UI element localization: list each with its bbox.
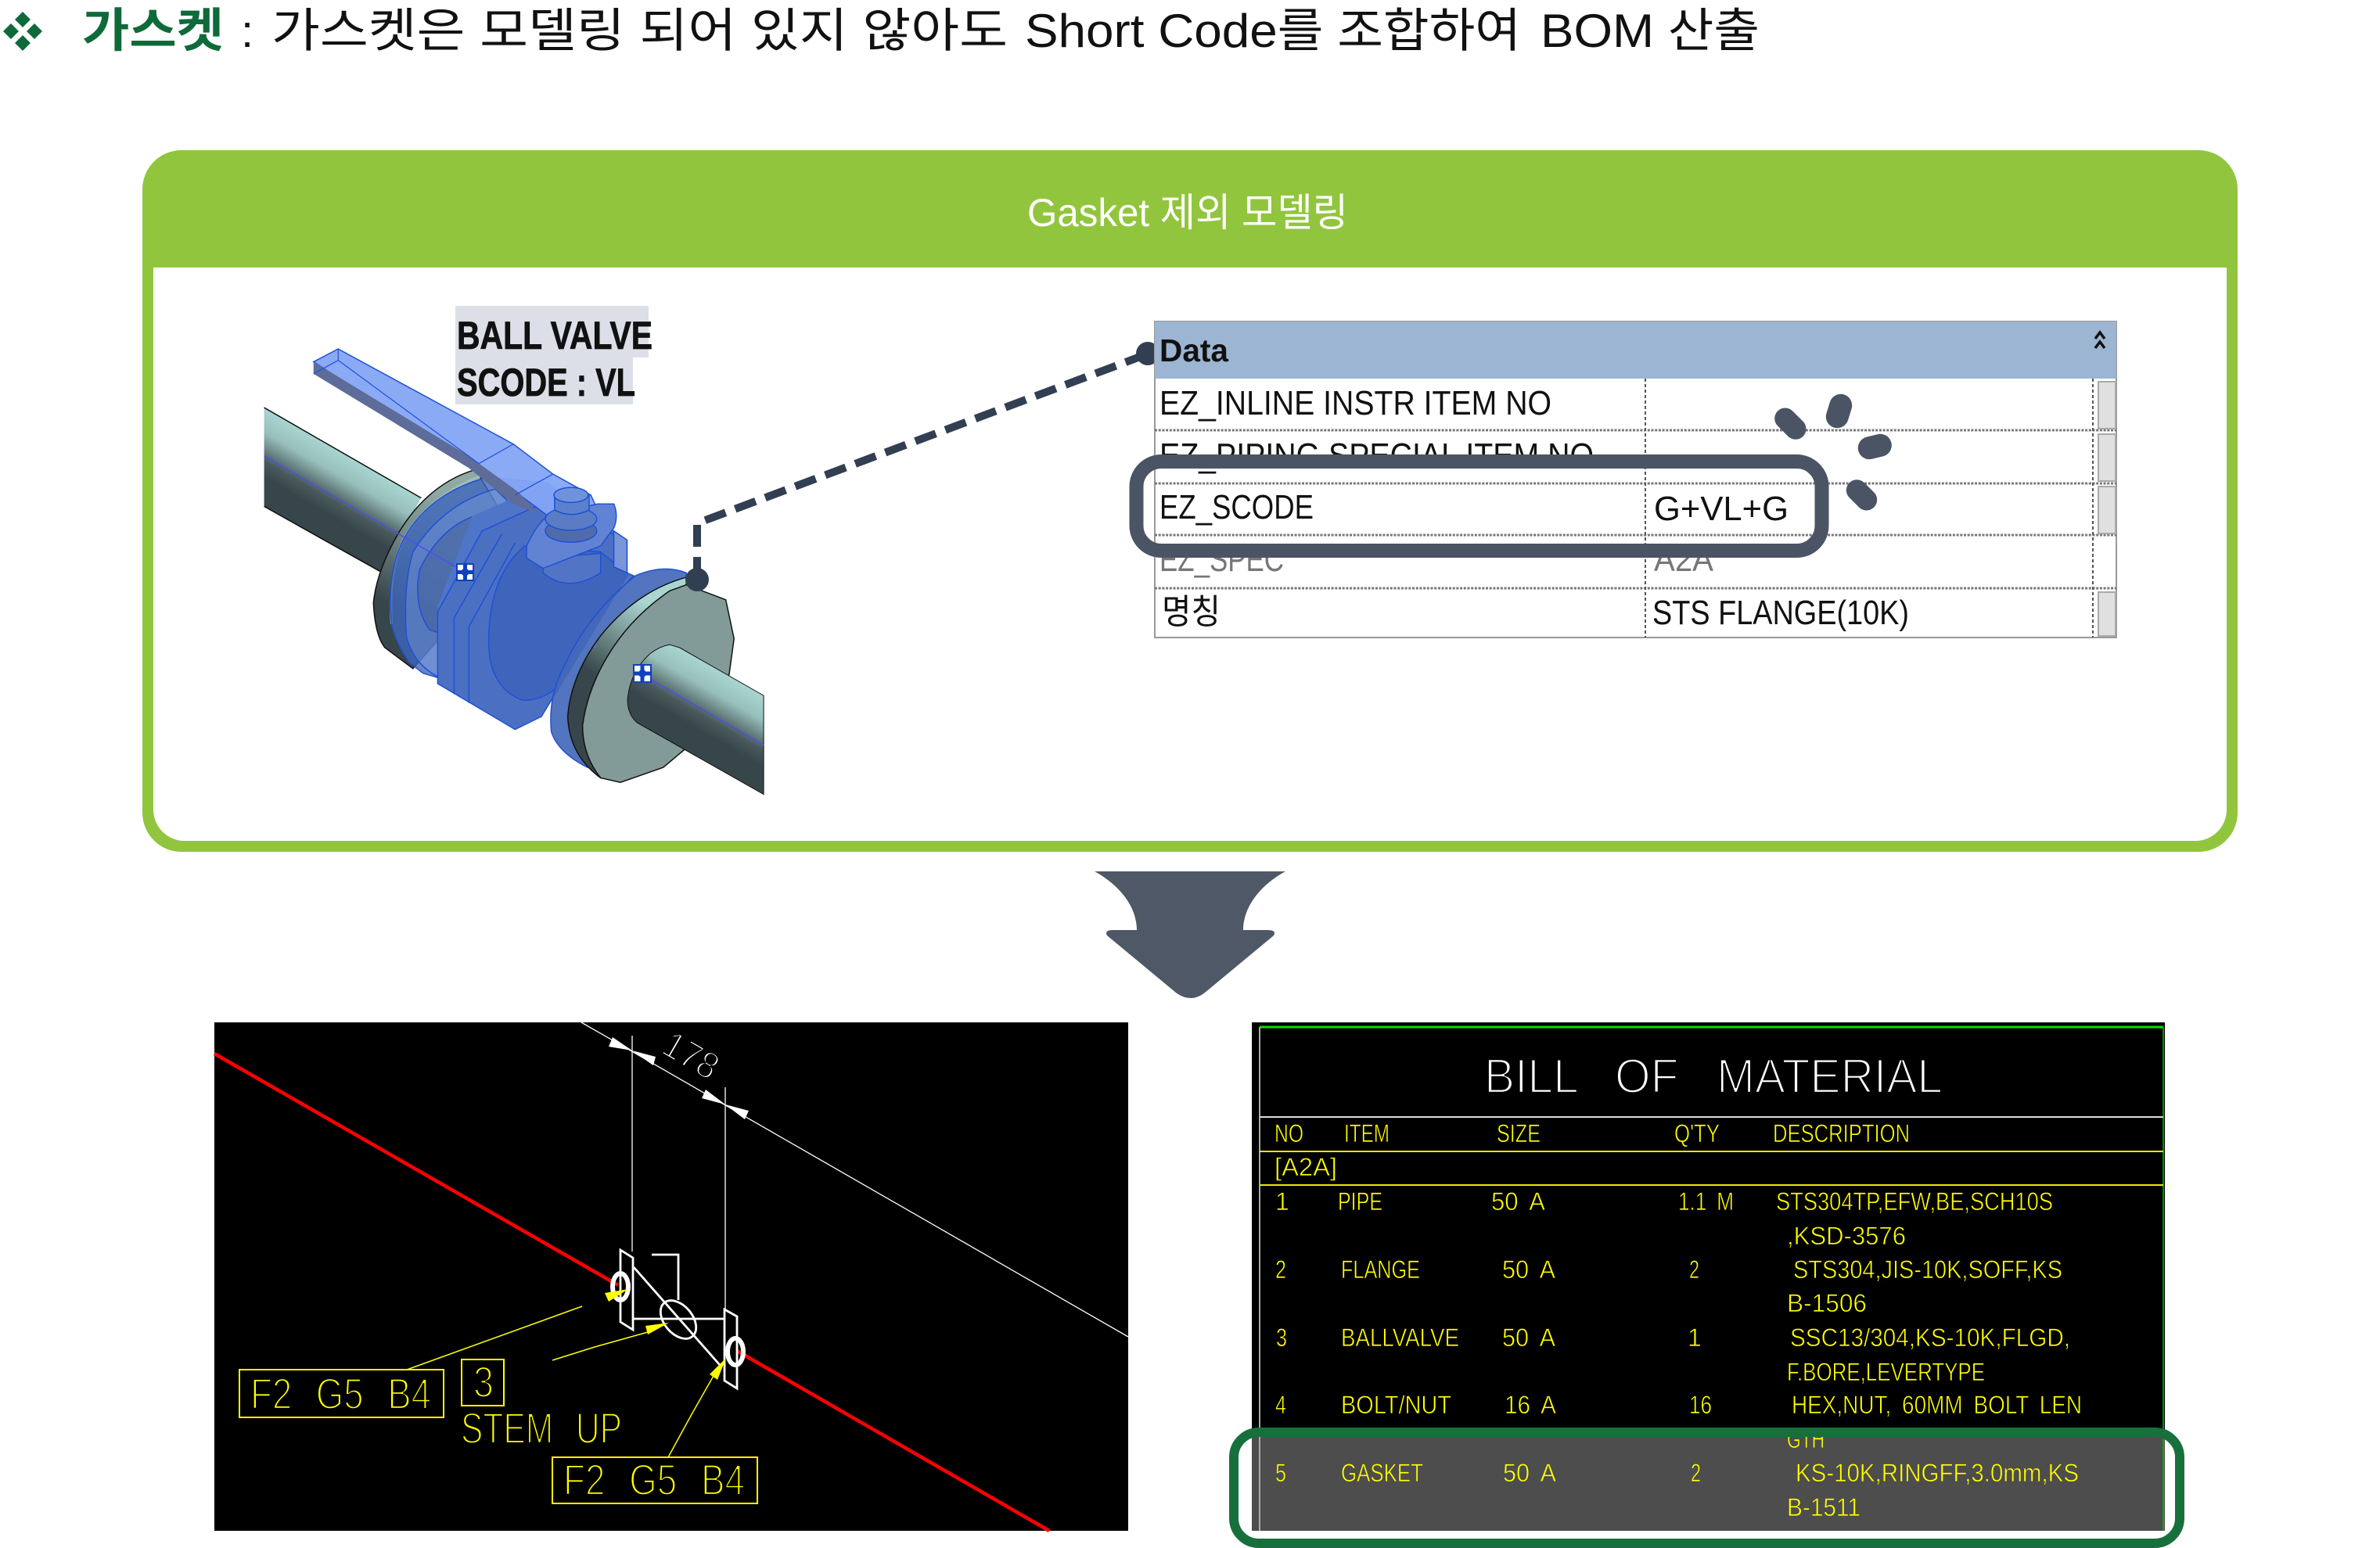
title: 가스켓은 모델링 되어 있지 않아도 [271,5,1008,57]
BOM column headers: ITEM [1344,1119,1390,1148]
table rows: 명칭 [1162,584,1221,634]
BOM column headers: Q'TY [1674,1119,1720,1148]
panel: isometric CAD drawing [214,1022,1128,1531]
CAD tag left: F2 G5 B4 [250,1369,431,1418]
callout: gasket row highlight box [1234,1432,2180,1543]
BOM row: bolt and nut [1275,1391,2082,1453]
BOM row: flange: FLANGE [1341,1255,1420,1284]
BOM column headers: SIZE [1497,1119,1541,1148]
title: BOM 산출 [1541,5,1760,57]
BOM row: ball valve: SSC13/304,KS-10K,FLGD, [1790,1324,2070,1352]
label: ball valve scode: BALL VALVE [457,314,653,357]
table rows: EZ_SPEC [1159,541,1284,579]
BOM row: ball valve: F.BORE,LEVERTYPE [1787,1358,1985,1386]
ball valve 3D model [264,349,764,795]
BOM row: flange: STS304,JIS-10K,SOFF,KS [1793,1255,2062,1284]
BOM row: bolt and nut: 16 [1689,1391,1712,1419]
arrow: dashed leader from valve to data table [685,342,1159,591]
CAD stem note: STEM UP [461,1403,622,1453]
BOM row: pipe: ,KSD-3576 [1787,1222,1906,1250]
BOM row: bolt and nut: 16 A [1505,1391,1557,1419]
CAD item number: 3 [473,1357,494,1406]
BOM row: gasket: 50 A [1503,1459,1557,1487]
BOM row: gasket: B-1511 [1787,1493,1860,1521]
BOM row: ball valve: 50 A [1502,1324,1556,1352]
table rows: G+VL+G [1654,490,1789,528]
BOM row: gasket: 5 [1275,1459,1286,1487]
BOM row: flange: 2 [1689,1255,1699,1284]
BOM row: pipe [1275,1187,2053,1250]
BOM row: gasket: KS-10K,RINGFF,3.0mm,KS [1796,1459,2079,1487]
label: ball valve scode [455,306,653,404]
BOM row: pipe: PIPE [1338,1187,1382,1216]
dimension text: 178 [656,1024,726,1089]
BOM row: pipe: 50 A [1491,1187,1546,1216]
BOM row: flange [1275,1255,2062,1317]
BOM row: ball valve: BALLVALVE [1341,1324,1459,1352]
BOM row: bolt and nut: HEX,NUT, 60MM BOLT LEN [1792,1391,2082,1419]
title: : [241,6,253,57]
table rows: A2A [1654,541,1714,579]
BOM title: BILL OF MATERIAL [1484,1050,1943,1104]
BOM row: pipe: 1 [1275,1187,1289,1216]
BOM row: ball valve: 3 [1276,1324,1287,1352]
table header [1155,321,2116,379]
BOM row: gasket [1275,1459,2079,1521]
BOM row: ball valve: 1 [1688,1324,1702,1352]
icon: loading spinner blobs [1785,405,1880,500]
BOM row: bolt and nut: 4 [1275,1391,1286,1419]
panel: data property table [1155,321,2116,638]
table rows: EZ_PIPING SPECIAL ITEM NO [1159,436,1594,475]
BOM row: gasket: 2 [1691,1459,1701,1487]
BOM row: flange: 2 [1275,1255,1286,1284]
BOM column headers [1274,1119,1910,1181]
title [82,0,1760,61]
highlighted gasket row background [1252,1435,2165,1531]
BOM column headers: [A2A] [1274,1153,1337,1181]
BOM row: flange: B-1506 [1787,1289,1867,1317]
arrow: down [1095,871,1285,998]
BOM column headers: DESCRIPTION [1773,1119,1910,1148]
table rows [1159,384,1909,634]
icon: model grip markers [457,564,651,682]
BOM row: ball valve [1276,1324,2070,1386]
table header: Data [1159,332,1229,368]
label: ball valve scode: SCODE : VL [457,361,635,404]
BOM row: pipe: 1.1 M [1678,1187,1734,1216]
BOM row: gasket: GASKET [1341,1459,1423,1487]
panel heading: Gasket 제외 모델링 [1027,191,1348,235]
table rows: STS FLANGE(10K) [1652,594,1909,632]
table rows: EZ_INLINE INSTR ITEM NO [1159,384,1551,422]
CAD linework [214,1022,1128,1531]
BOM row: pipe: STS304TP,EFW,BE,SCH10S [1776,1187,2053,1216]
BOM column headers: NO [1274,1119,1303,1148]
BOM row: flange: 50 A [1502,1255,1556,1284]
handle [314,349,599,516]
table rows: EZ_SCODE [1159,488,1314,526]
icon: diamond bullet [3,12,42,51]
callout: EZ_SCODE highlight box [1136,462,1821,551]
CAD tag right: F2 G5 B4 [563,1455,745,1504]
BOM row: bolt and nut: BOLT/NUT [1341,1391,1451,1419]
panel: bill of material [1252,1022,2165,1531]
BOM row: bolt and nut: GTH [1787,1425,1825,1453]
title: Short Code를 조합하여 [1025,5,1521,57]
